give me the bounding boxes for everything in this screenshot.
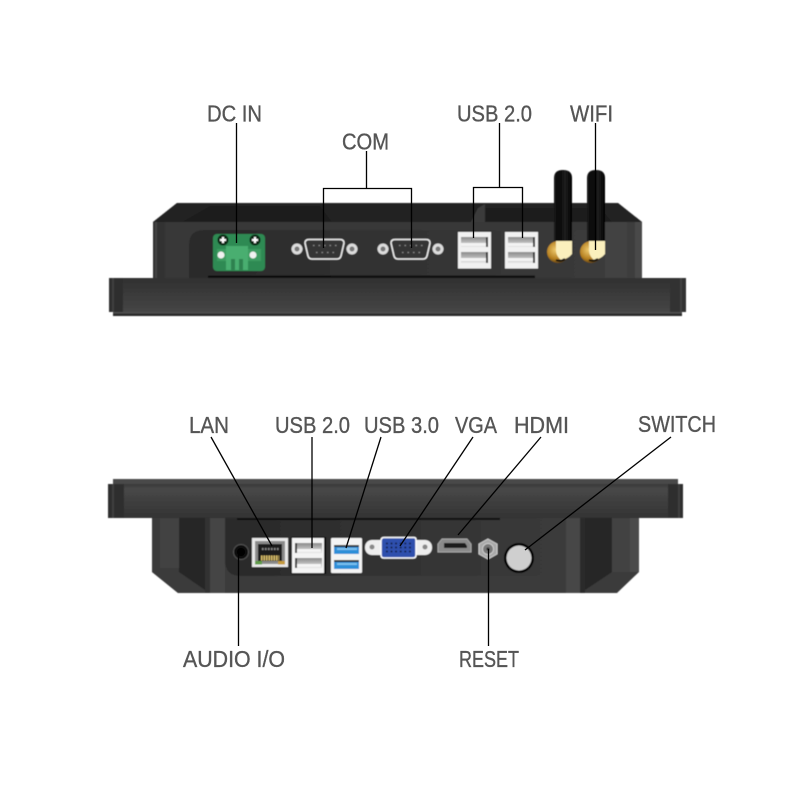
label: USB 3.0: USB 3.0 bbox=[364, 412, 439, 438]
front frame top bbox=[109, 278, 686, 316]
arrow: USB 2.0 bbox=[311, 437, 313, 548]
arrow: LAN bbox=[211, 437, 272, 546]
port: USB 2.0 bbox=[291, 537, 326, 574]
label: AUDIO I/O: AUDIO I/O bbox=[183, 646, 285, 672]
device body bottom bbox=[152, 518, 639, 593]
port: VGA bbox=[365, 538, 432, 558]
port: audio jack bbox=[234, 544, 248, 560]
button: power switch bbox=[504, 543, 534, 573]
label: USB 2.0 top: USB 2.0 bbox=[457, 100, 532, 126]
device body top bbox=[153, 203, 642, 279]
port: HDMI bbox=[438, 539, 471, 552]
port: COM 1 bbox=[292, 240, 358, 259]
leader lines: top device bbox=[236, 123, 596, 250]
port: LAN bbox=[252, 538, 288, 567]
arrow: AUDIO I/O bbox=[238, 553, 240, 646]
label: USB 2.0 bottom: USB 2.0 bbox=[275, 412, 350, 438]
device: bottom view bbox=[108, 479, 683, 593]
button: reset bbox=[479, 539, 497, 559]
port: USB 2.0 pair right bbox=[505, 232, 538, 268]
front frame bottom bbox=[108, 479, 683, 518]
antenna: WIFI right bbox=[580, 170, 605, 263]
port: DC IN green terminal bbox=[213, 234, 265, 271]
arrow: COM bracket bbox=[324, 151, 412, 248]
label: RESET: RESET bbox=[459, 646, 519, 672]
label: COM: COM bbox=[342, 128, 389, 154]
arrow: WIFI bbox=[594, 123, 596, 250]
label: SWITCH: SWITCH bbox=[638, 411, 716, 437]
labels bbox=[183, 100, 716, 672]
label: VGA: VGA bbox=[455, 412, 498, 438]
label: WIFI: WIFI bbox=[570, 100, 613, 126]
arrow: DC IN bbox=[236, 123, 238, 243]
label: DC IN: DC IN bbox=[207, 100, 262, 126]
arrow: VGA bbox=[400, 437, 473, 546]
antenna: WIFI left bbox=[547, 170, 572, 263]
leader lines: bottom device bbox=[211, 437, 671, 646]
arrow: SWITCH bbox=[525, 437, 671, 550]
label: HDMI: HDMI bbox=[514, 412, 569, 438]
device: top view bbox=[109, 170, 686, 316]
label: LAN: LAN bbox=[189, 412, 229, 438]
port: USB 3.0 bbox=[331, 538, 362, 573]
port: USB 2.0 pair left bbox=[458, 232, 491, 268]
arrow: USB 2.0 bracket bbox=[474, 123, 522, 238]
arrow: USB 3.0 bbox=[346, 437, 381, 548]
arrow: RESET bbox=[488, 549, 490, 646]
port: COM 2 bbox=[378, 240, 444, 259]
arrow: HDMI bbox=[458, 437, 541, 535]
